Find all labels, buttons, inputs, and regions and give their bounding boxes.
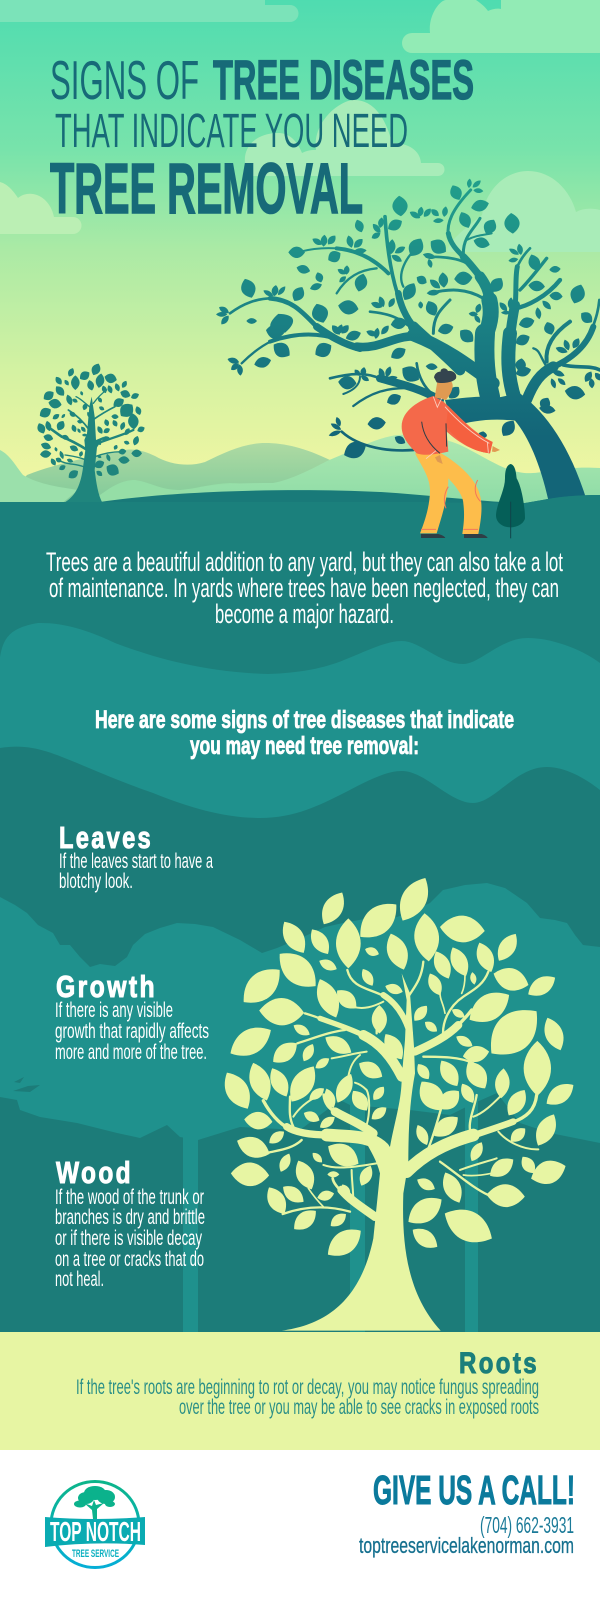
sign: leaves: If the leaves start to have a [59,850,213,873]
sign: leaves: Leaves [59,820,153,855]
subheading: you may need tree removal: [190,732,419,760]
large leaning tree [200,170,600,503]
neck and head [435,379,453,400]
clouds [0,0,600,252]
person bending toward the tree [402,368,500,538]
hands [435,446,500,464]
sign: growth: Growth [56,969,157,1004]
small tree on the left [35,362,146,503]
roots heading: Roots [459,1347,539,1380]
sign: growth: growth that rapidly affects [55,1020,209,1043]
sign: growth: If there is any visible [55,999,173,1022]
sign: wood: not heal. [55,1268,104,1291]
legs [415,452,482,534]
branches [263,962,538,1217]
sign: wood: Wood [56,1155,133,1190]
logo: TREE SERVICE [72,1548,119,1560]
footer [0,1450,600,1600]
sign: wood [55,1155,205,1291]
trunk [282,973,441,1331]
hair [434,368,456,383]
large pale tree illustration [217,872,578,1331]
logo [45,1482,145,1568]
intro text [46,547,563,629]
sign: leaves [59,820,213,893]
intro text: become a major hazard. [215,599,394,629]
roots text [76,1376,539,1419]
sign: growth: more and more of the tree. [55,1041,207,1064]
sign: wood: or if there is visible decay [55,1227,202,1250]
intro section background waves [0,600,600,1332]
leaves [217,872,578,1264]
sign: growth [55,969,209,1064]
ground [0,490,600,630]
shoes [421,534,488,538]
logo: TOP NOTCH [50,1516,141,1547]
logo tree icon [74,1486,115,1519]
hills [0,435,600,510]
title [50,48,474,229]
sweater [402,396,493,455]
small pine tree [496,464,525,538]
subheading [95,706,514,760]
title: TREE REMOVAL [50,150,363,229]
sign: leaves: blotchy look. [59,870,133,893]
sign: wood: If the wood of the trunk or [55,1186,204,1209]
sky background [0,0,600,500]
sign: wood: branches is dry and brittle [55,1206,205,1229]
sign: wood: on a tree or cracks that do [55,1248,204,1271]
panel: roots [0,1332,600,1450]
title: SIGNS OF [50,49,199,111]
